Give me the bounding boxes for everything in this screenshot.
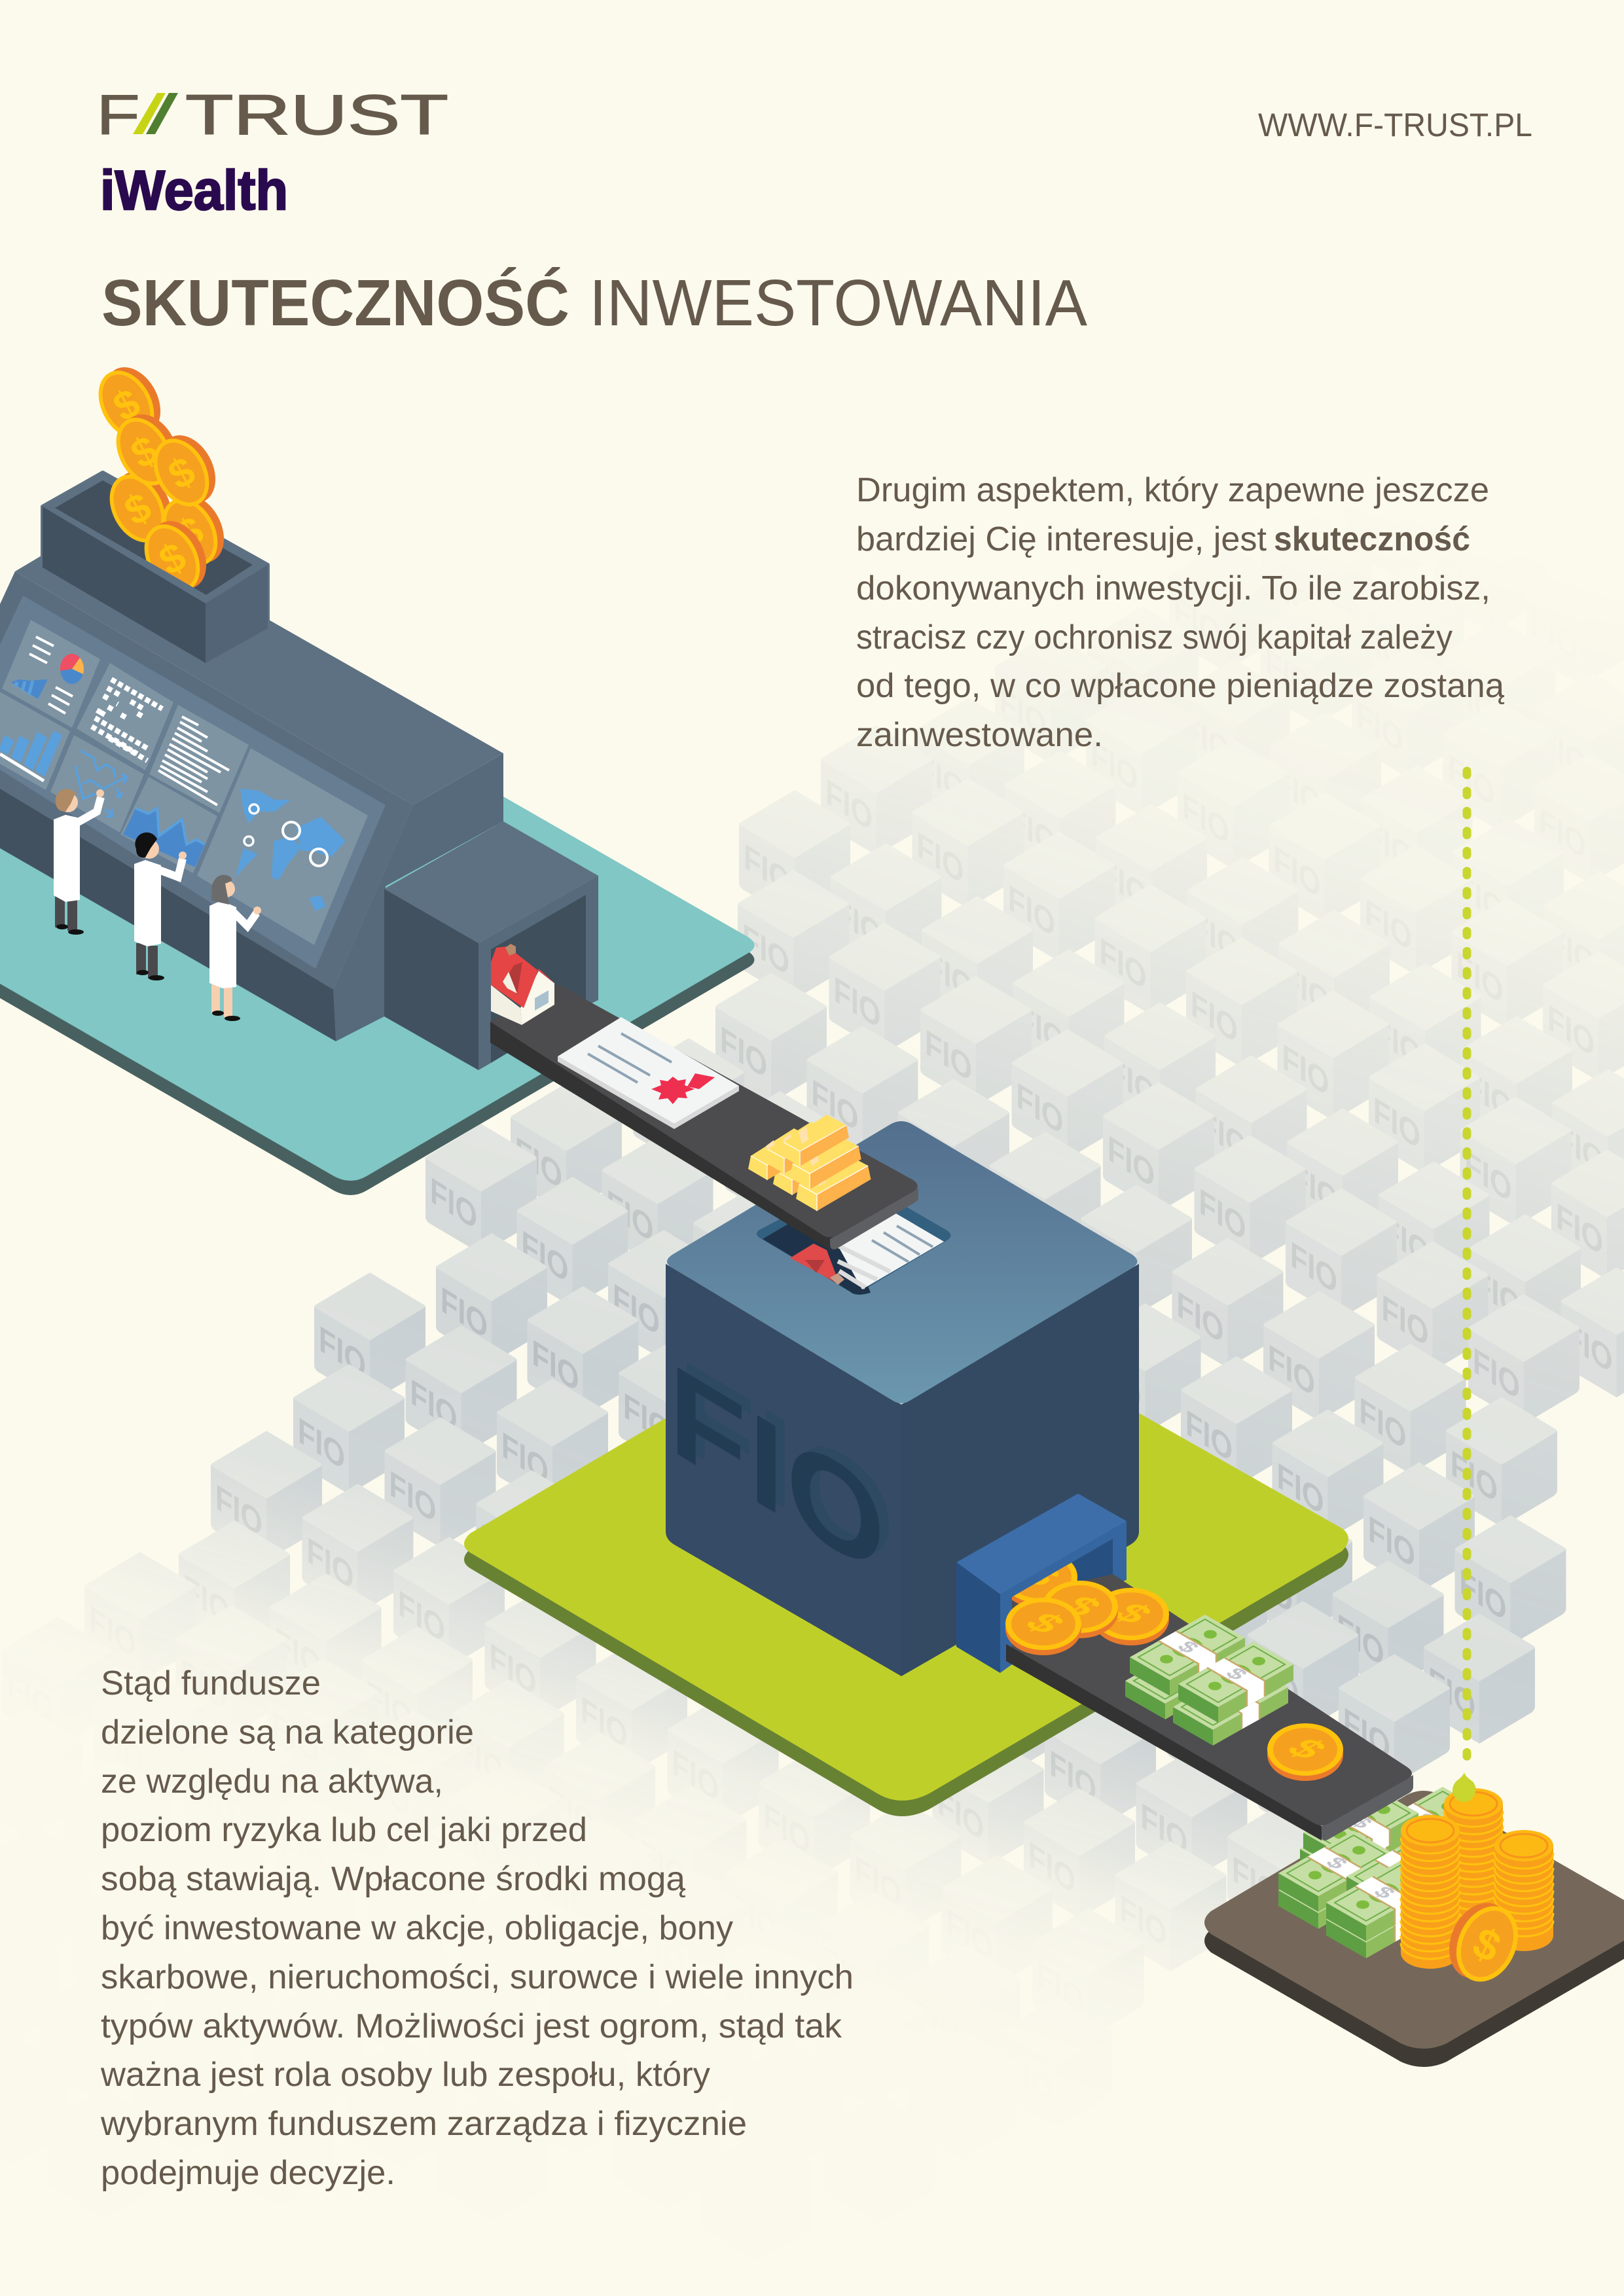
blue outlet back [956, 1494, 1127, 1673]
cash on belt 2 [1125, 1615, 1293, 1746]
blue outlet left pillar [956, 1562, 1000, 1673]
title: INWESTOWANIA [589, 266, 1087, 340]
control panel face [0, 571, 413, 990]
logo: F/TRUST: F [96, 84, 140, 147]
house [491, 944, 556, 1025]
text block: lower left: dzielone są na kategorie [101, 1713, 474, 1751]
text block: upper right: Drugim aspektem, który zapewne jeszcze [856, 471, 1489, 509]
person 2 [134, 833, 187, 980]
text block: upper right [856, 471, 1504, 754]
person 3 [209, 875, 261, 1021]
hopper right face [206, 565, 268, 663]
screen: line chart [50, 735, 144, 833]
text block: lower left: typów aktywów. Możliwości jest ogrom, stąd tak [101, 2007, 842, 2045]
cash stacks on brown platform [1278, 1787, 1483, 1958]
title: SKUTECZNOŚĆ [101, 266, 569, 340]
text block: lower left: podejmuje decyzje. [101, 2154, 395, 2192]
website address: WWW.F-TRUST.PL [1258, 107, 1532, 143]
text block: upper right: bardziej Cię interesuje, jest [856, 520, 1267, 558]
text block: upper right: stracisz czy ochronisz swój kapitał zależy [856, 619, 1453, 656]
coin stacks [1401, 1788, 1553, 1969]
screen: area chart [120, 777, 217, 873]
dotted line [1462, 771, 1471, 1767]
standing coin: $ [1466, 1918, 1507, 1971]
box label FIO: FIO [669, 1335, 888, 1607]
text block: lower left: skarbowe, nieruchomości, surowce i wiele innych [101, 1958, 854, 1996]
text block: lower left [100, 1664, 854, 2192]
hopper rim [43, 507, 268, 603]
text block: lower left: wybranym funduszem zarządza i fizycznie [100, 2105, 747, 2143]
text block: upper right: skuteczność [1274, 520, 1470, 558]
logo: F/TRUST [96, 84, 448, 147]
falling documents [838, 1213, 944, 1289]
person 1 [54, 789, 104, 935]
opening shadow [763, 1214, 871, 1295]
machine [0, 357, 598, 1070]
screen: list [149, 705, 249, 813]
screen: bar chart [0, 692, 70, 790]
falling house [790, 1244, 844, 1285]
text block: lower left: być inwestowane w akcje, obligacje, bony [101, 1909, 733, 1947]
tunnel front wall [384, 889, 478, 1070]
logo: F/TRUST: TRUST [185, 84, 448, 147]
machine top [15, 555, 503, 805]
gold bars [748, 1115, 871, 1211]
tunnel interior [491, 895, 586, 1063]
title [101, 266, 1087, 340]
machine front base [0, 786, 336, 1041]
FIO box [666, 1121, 1139, 1676]
standing coin [1437, 1893, 1530, 1992]
text block: lower left: poziom ryzyka lub cel jaki przed [101, 1811, 587, 1849]
conveyor belt 2 [1006, 1574, 1413, 1840]
logo: iWealth: iWealth [100, 160, 288, 222]
box label FIO: FIO [678, 1330, 897, 1602]
text block: upper right: dokonywanych inwestycji. To ile zarobisz, [856, 569, 1490, 607]
certificate [558, 1017, 739, 1129]
pin drop [1453, 1772, 1475, 1802]
screen: data grid [77, 663, 173, 770]
green platform [464, 1413, 1348, 1816]
hopper front [43, 507, 206, 663]
text block: lower left: sobą stawiają. Wpłacone środki mogą [101, 1860, 685, 1898]
text block: lower left: Stąd fundusze [101, 1664, 321, 1702]
teal platform [0, 797, 754, 1195]
panel inset [0, 596, 386, 969]
brown platform [1204, 1791, 1624, 2067]
background pattern: FIO cubes [84, 668, 1624, 1968]
conveyor belt 1 [490, 984, 918, 1250]
coins falling into hopper [88, 357, 235, 601]
opening in box top [757, 1206, 950, 1293]
text block: lower left: ze względu na aktywa, [101, 1763, 443, 1801]
screen: world map [197, 748, 368, 945]
text block: upper right: zainwestowane. [856, 716, 1103, 754]
text block: lower left: ważna jest rola osoby lub zespołu, który [100, 2056, 710, 2094]
tunnel top [384, 821, 598, 943]
machine right side [333, 753, 503, 1041]
hopper [43, 357, 268, 663]
coins on belt 2 [1001, 1551, 1343, 1781]
screen: summary [2, 620, 100, 728]
tunnel arch [478, 876, 598, 1070]
text block: upper right: od tego, w co wpłacone pieniądze zostaną [856, 667, 1504, 705]
